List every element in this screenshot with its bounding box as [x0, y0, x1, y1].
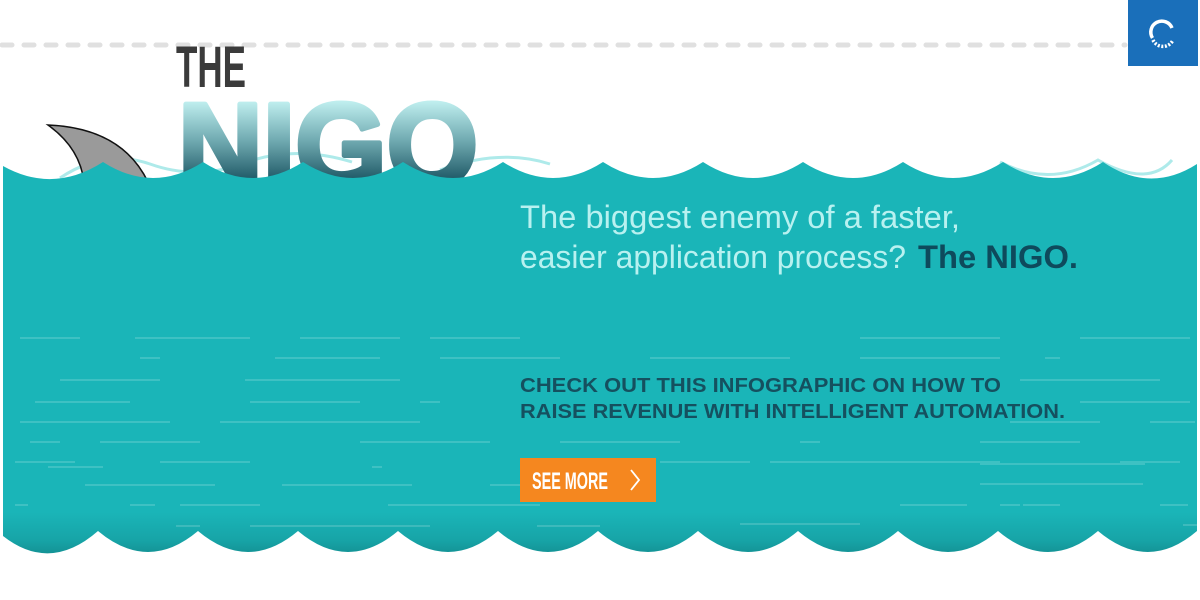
background wave outline	[60, 153, 1172, 178]
headline text: The biggest enemy of a faster,	[520, 199, 960, 235]
icon: shark fin	[48, 125, 148, 182]
title: NIGO: NIGO	[178, 79, 478, 212]
headline text: The NIGO.	[918, 239, 1078, 275]
sea panel	[3, 162, 1197, 553]
dashed divider	[2, 42, 1125, 48]
call to action text	[520, 375, 1065, 423]
title: THE: THE	[176, 35, 246, 100]
button: see more: SEE MORE	[532, 468, 608, 495]
water streak lines	[15, 338, 1197, 526]
logo badge	[1128, 0, 1198, 66]
button: see more	[520, 458, 656, 502]
call to action text: RAISE REVENUE WITH INTELLIGENT AUTOMATION.	[520, 401, 1065, 423]
call to action text: CHECK OUT THIS INFOGRAPHIC ON HOW TO	[520, 375, 1001, 397]
headline text	[520, 199, 1078, 275]
headline text: easier application process?	[520, 239, 906, 275]
